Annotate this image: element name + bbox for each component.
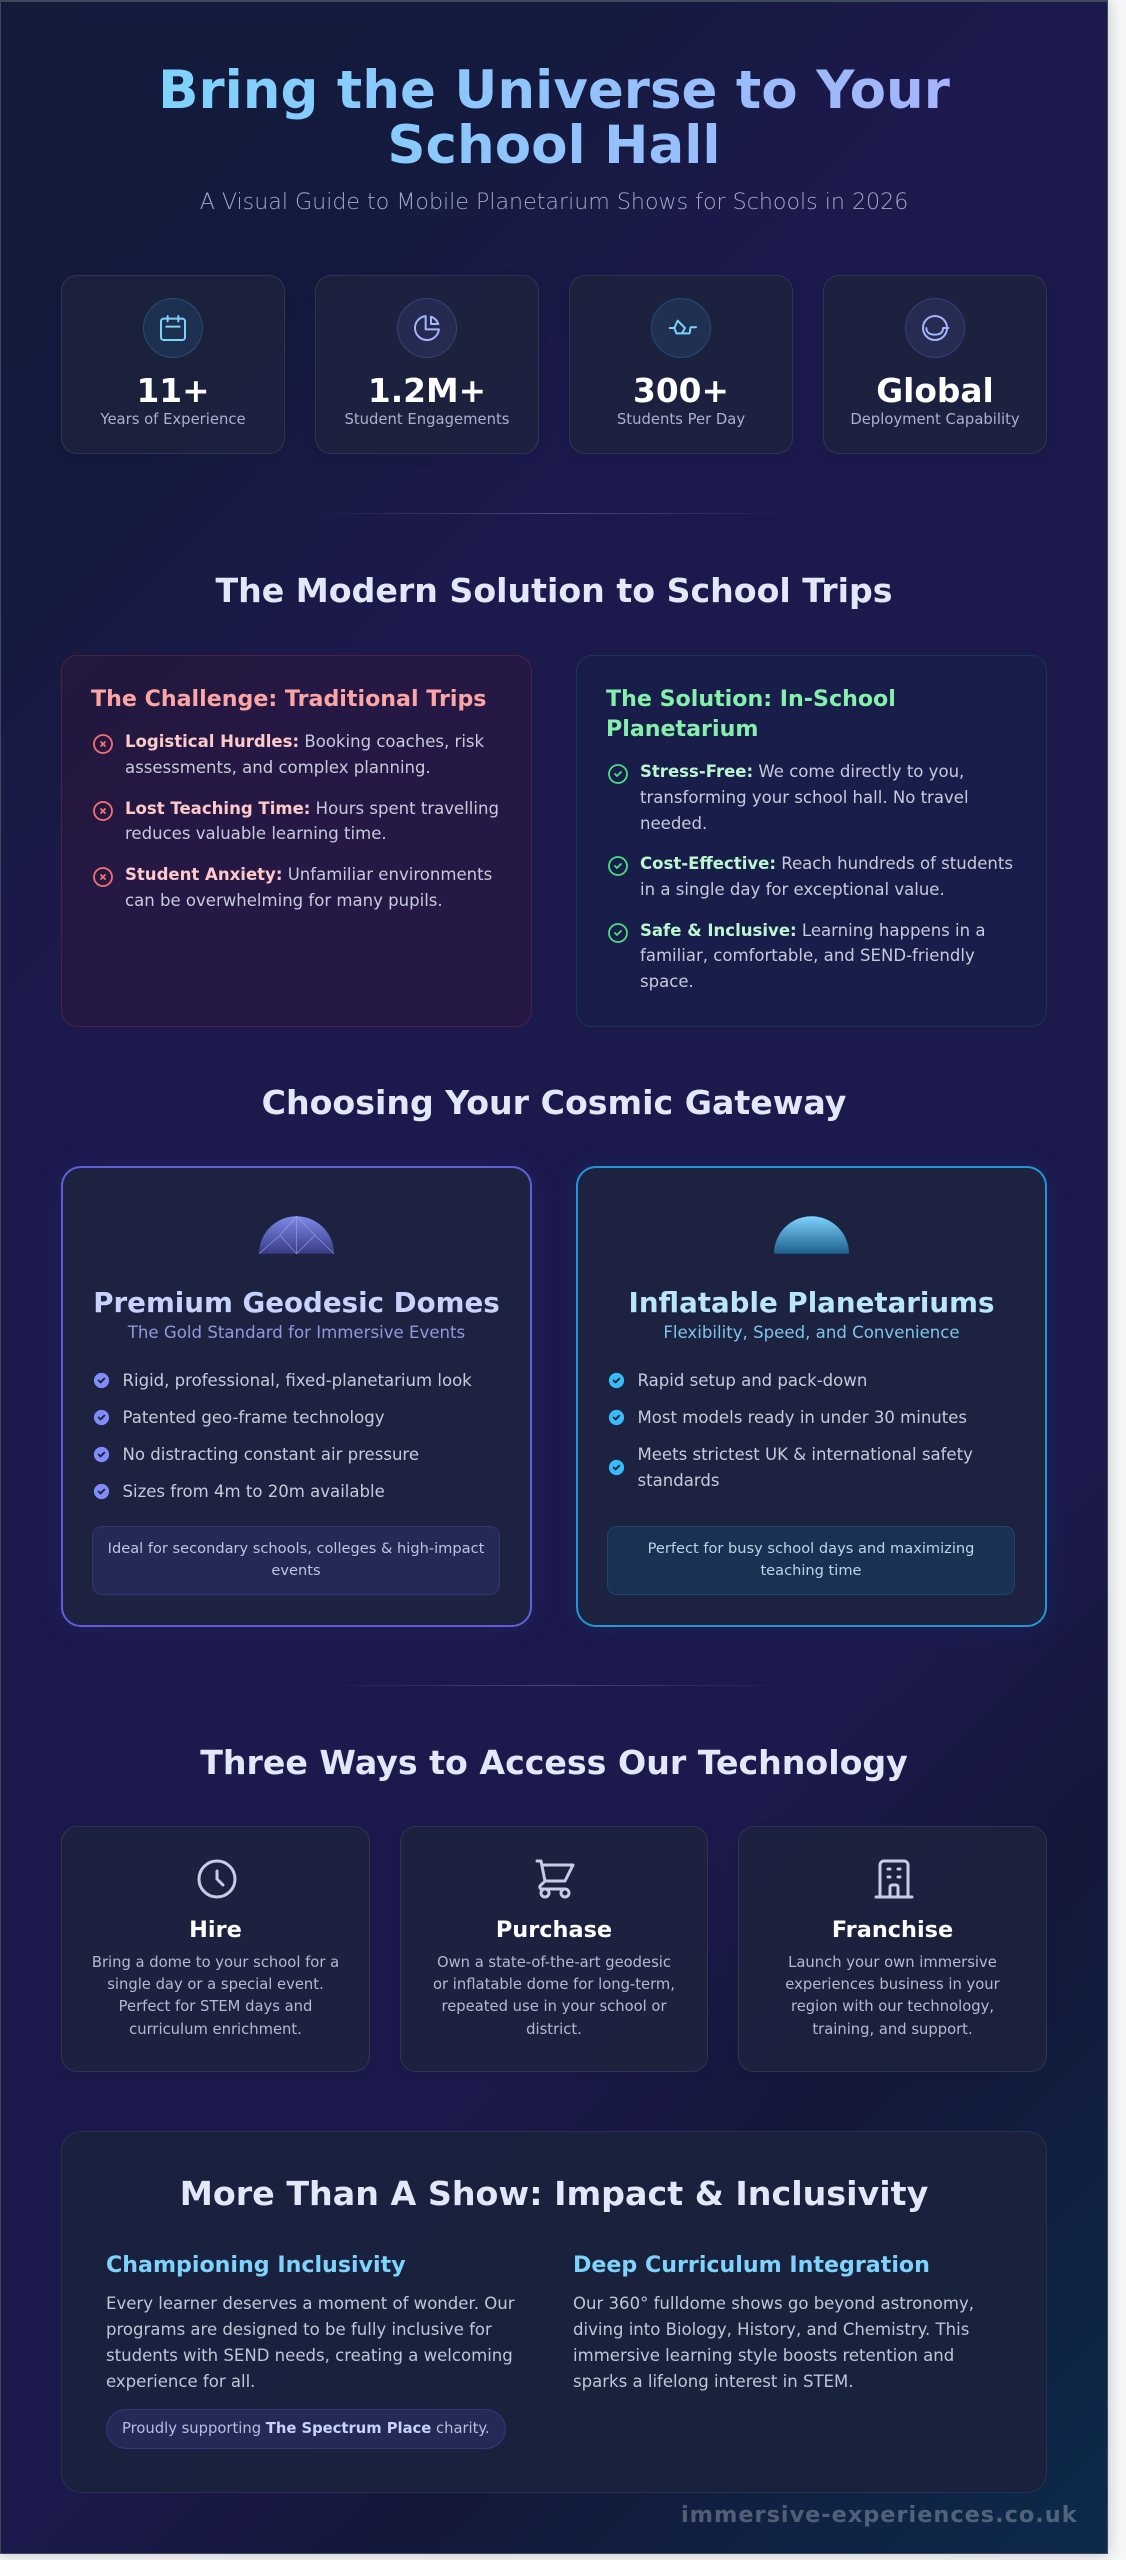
panel: purchase [400, 1826, 708, 2072]
solution heading [606, 686, 896, 742]
panel: challenge [61, 655, 532, 1027]
heading: cosmic gateway: Choosing Your Cosmic Gateway [262, 1083, 846, 1122]
solution item: cost-effective: in a single day for exceptional value. [640, 880, 945, 899]
inflatable subtitle: Flexibility, Speed, and Convenience [663, 1323, 960, 1342]
curriculum text: immersive learning style boosts retention and [573, 2346, 954, 2365]
inclusivity text [106, 2294, 515, 2391]
column: curriculum [573, 2252, 974, 2391]
panel: hire [61, 1826, 370, 2072]
franchise title: Franchise [832, 1917, 953, 1943]
solution item: stress-free: needed. [640, 814, 707, 833]
icon: clock [198, 1860, 236, 1898]
stat value: Global [876, 372, 994, 410]
hire text: single day or a special event. [107, 1976, 324, 1993]
curriculum text [573, 2294, 974, 2391]
feature: safety standards [608, 1444, 973, 1490]
feature list [94, 1370, 472, 1500]
callout: ideal for: events [271, 1562, 321, 1579]
purchase text: repeated use in your school or [441, 1998, 667, 2015]
stat card: students per day [569, 275, 793, 454]
feature: safety standards: Meets strictest UK & international safety [638, 1444, 973, 1464]
hire title: Hire [189, 1917, 242, 1943]
challenge item: student anxiety: can be overwhelming for many pupils. [125, 891, 443, 910]
solution heading: Planetarium [606, 716, 758, 742]
title [158, 60, 950, 176]
challenge item: student anxiety [93, 865, 492, 910]
stat label: Deployment Capability [850, 411, 1020, 428]
inclusivity text: experience for all. [106, 2372, 255, 2391]
challenge item: lost teaching time: Lost Teaching Time: Hours spent travelling [125, 798, 499, 818]
panel: solution [576, 655, 1047, 1027]
challenge heading: The Challenge: Traditional Trips [91, 686, 486, 712]
feature: rigid look: Rigid, professional, fixed-planetarium look [122, 1370, 472, 1390]
franchise text [785, 1954, 1000, 2038]
solution item: cost-effective [608, 854, 1013, 899]
icon: geodesic dome [259, 1216, 334, 1254]
panel: geodesic domes [61, 1166, 532, 1627]
franchise text: region with our technology, [791, 1998, 994, 2015]
hire text: curriculum enrichment. [129, 2021, 302, 2038]
callout: perfect for: teaching time [760, 1562, 862, 1579]
icon: students [651, 298, 711, 358]
hire text [92, 1954, 339, 2038]
title: Bring the Universe to Your [158, 60, 950, 121]
challenge item: logistical hurdles [93, 732, 484, 777]
franchise text: Launch your own immersive [788, 1954, 997, 1971]
icon: cart [536, 1860, 574, 1898]
solution item: stress-free: transforming your school hall. No travel [640, 788, 969, 807]
solution item: stress-free [608, 762, 969, 833]
callout: perfect for [607, 1526, 1015, 1595]
solution item: stress-free: Stress-Free: We come directly to you, [640, 762, 964, 781]
feature: geo-frame: Patented geo-frame technology [122, 1408, 385, 1426]
inflatable title: Inflatable Planetariums [629, 1286, 994, 1319]
feature list [608, 1370, 973, 1490]
purchase text: Own a state-of-the-art geodesic [437, 1954, 671, 1971]
inclusivity text: students with SEND needs, creating a welcoming [106, 2346, 513, 2365]
icon: calendar [143, 298, 203, 358]
solution heading: The Solution: In-School [606, 686, 896, 712]
icon: inflatable dome [774, 1216, 849, 1254]
stat label: Years of Experience [100, 411, 246, 428]
title: School Hall [387, 115, 721, 176]
callout: ideal for [92, 1526, 500, 1595]
panel: impact and inclusivity [61, 2131, 1047, 2493]
heading: modern solution: The Modern Solution to School Trips [215, 571, 893, 610]
stat card: deployment [823, 275, 1047, 454]
feature: ready in 30 minutes: Most models ready in under 30 minutes [638, 1408, 967, 1426]
column: inclusivity [106, 2252, 515, 2449]
solution item: safe and inclusive: Safe & Inclusive: Learning happens in a [640, 920, 986, 940]
inclusivity text: programs are designed to be fully inclusive for [106, 2320, 492, 2339]
inclusivity heading: Championing Inclusivity [106, 2252, 406, 2278]
impact heading: More Than A Show: Impact & Inclusivity [180, 2174, 928, 2213]
curriculum text: Our 360° fulldome shows go beyond astronomy, [573, 2294, 974, 2313]
dome title: Premium Geodesic Domes [93, 1286, 500, 1319]
challenge item: logistical hurdles: assessments, and complex planning. [125, 758, 431, 777]
inclusivity text: Every learner deserves a moment of wonder. Our [106, 2294, 515, 2313]
stat label: Student Engagements [344, 411, 510, 428]
solution item: cost-effective: Cost-Effective: Reach hundreds of students [640, 854, 1013, 873]
stat value: 300+ [633, 372, 729, 410]
franchise text: training, and support. [812, 2021, 973, 2038]
stat card: years of experience [61, 275, 285, 454]
solution item: safe and inclusive: space. [640, 972, 694, 991]
stat value: 1.2M+ [368, 372, 486, 410]
feature: safety standards: standards [638, 1470, 719, 1490]
stat value: 11+ [136, 372, 210, 410]
challenge item: lost teaching time: reduces valuable learning time. [125, 824, 387, 843]
stat card: student engagements [315, 275, 539, 454]
stat label: Students Per Day [617, 411, 745, 428]
charity pill: Proudly supporting The Spectrum Place charity. [122, 2420, 490, 2437]
panel: inflatable planetariums [576, 1166, 1047, 1627]
heading: three ways: Three Ways to Access Our Technology [200, 1743, 908, 1782]
curriculum text: diving into Biology, History, and Chemistry. This [573, 2320, 969, 2339]
panel: franchise [738, 1826, 1047, 2072]
icon: building [874, 1860, 914, 1898]
solution item: safe and inclusive: familiar, comfortable, and SEND-friendly [640, 946, 975, 965]
hire text: Bring a dome to your school for a [92, 1954, 339, 1971]
charity pill [106, 2409, 506, 2449]
subtitle: A Visual Guide to Mobile Planetarium Shows for Schools in 2026 [200, 189, 908, 215]
purchase text [433, 1954, 675, 2038]
icon: globe [905, 298, 965, 358]
purchase title: Purchase [496, 1917, 612, 1943]
purchase text: or inflatable dome for long-term, [433, 1976, 675, 1993]
curriculum text: sparks a lifelong interest in STEM. [573, 2372, 854, 2391]
curriculum heading: Deep Curriculum Integration [573, 2252, 930, 2278]
solution item: safe and inclusive [608, 920, 986, 991]
dome subtitle: The Gold Standard for Immersive Events [128, 1323, 465, 1342]
challenge item: student anxiety: Student Anxiety: Unfamiliar environments [125, 865, 492, 884]
watermark: immersive-experiences.co.uk [681, 2502, 1078, 2528]
purchase text: district. [526, 2021, 582, 2038]
hire text: Perfect for STEM days and [119, 1998, 312, 2015]
feature: rapid setup: Rapid setup and pack-down [638, 1370, 867, 1390]
icon: pie chart [397, 298, 457, 358]
franchise text: experiences business in your [785, 1976, 1000, 1993]
feature: sizes: Sizes from 4m to 20m available [122, 1482, 385, 1500]
challenge item: logistical hurdles: Logistical Hurdles: Booking coaches, risk [125, 732, 484, 751]
callout: ideal for: Ideal for secondary schools, colleges & high-impact [108, 1540, 484, 1557]
feature: air pressure: No distracting constant air pressure [122, 1444, 419, 1464]
challenge item: lost teaching time [93, 798, 499, 843]
callout: perfect for: Perfect for busy school days and maximizing [648, 1540, 974, 1557]
